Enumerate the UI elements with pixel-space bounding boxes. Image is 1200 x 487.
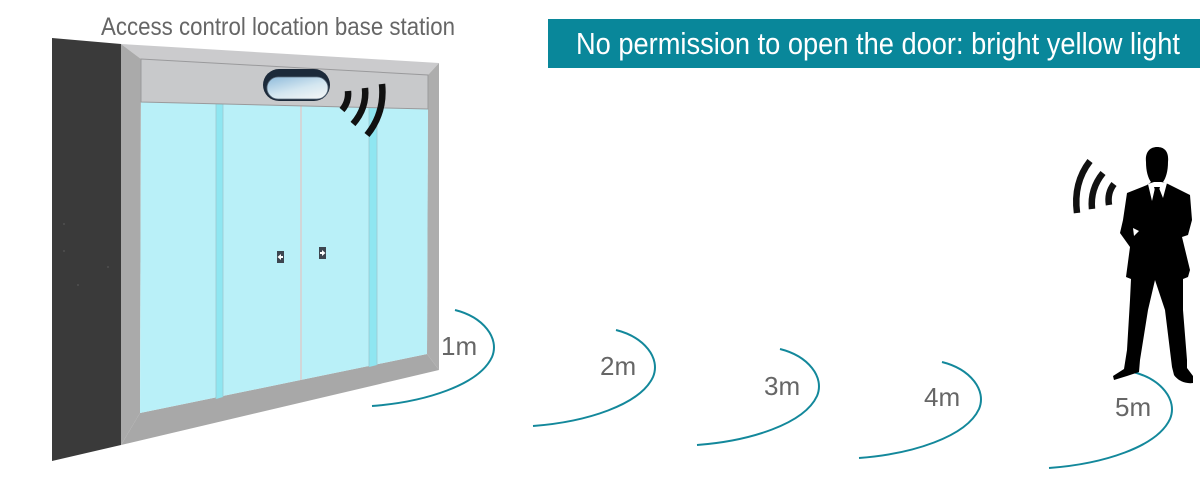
shirt collar [1148, 182, 1167, 201]
distance marker: 4m [859, 362, 981, 458]
heading: access control location base station: Access control location base station [101, 13, 455, 41]
door frame [121, 44, 439, 445]
icon: signal waves from person [1076, 161, 1114, 213]
body [1113, 147, 1193, 383]
distance marker: 2m [533, 330, 655, 426]
distance marker: 5m: 5m [1115, 392, 1151, 422]
dark wall [52, 38, 121, 461]
person silhouette [1113, 147, 1193, 383]
tie [1154, 187, 1160, 201]
glass doors [140, 102, 428, 413]
distance marker: 3m: 3m [764, 371, 800, 401]
distance marker: 1m [372, 310, 494, 406]
cuff [1133, 228, 1139, 236]
icon: signal waves from base station [342, 84, 382, 135]
door assembly [121, 44, 439, 445]
distance marker: 1m: 1m [441, 331, 477, 361]
header panel [141, 59, 428, 109]
banner: door status [548, 19, 1200, 68]
distance marker: 5m [1049, 372, 1172, 468]
base station device [263, 69, 330, 101]
distance marker: 2m: 2m [600, 351, 636, 381]
door handles [277, 247, 326, 263]
distance marker: 4m: 4m [924, 382, 960, 412]
distance marker: 3m [697, 349, 819, 445]
